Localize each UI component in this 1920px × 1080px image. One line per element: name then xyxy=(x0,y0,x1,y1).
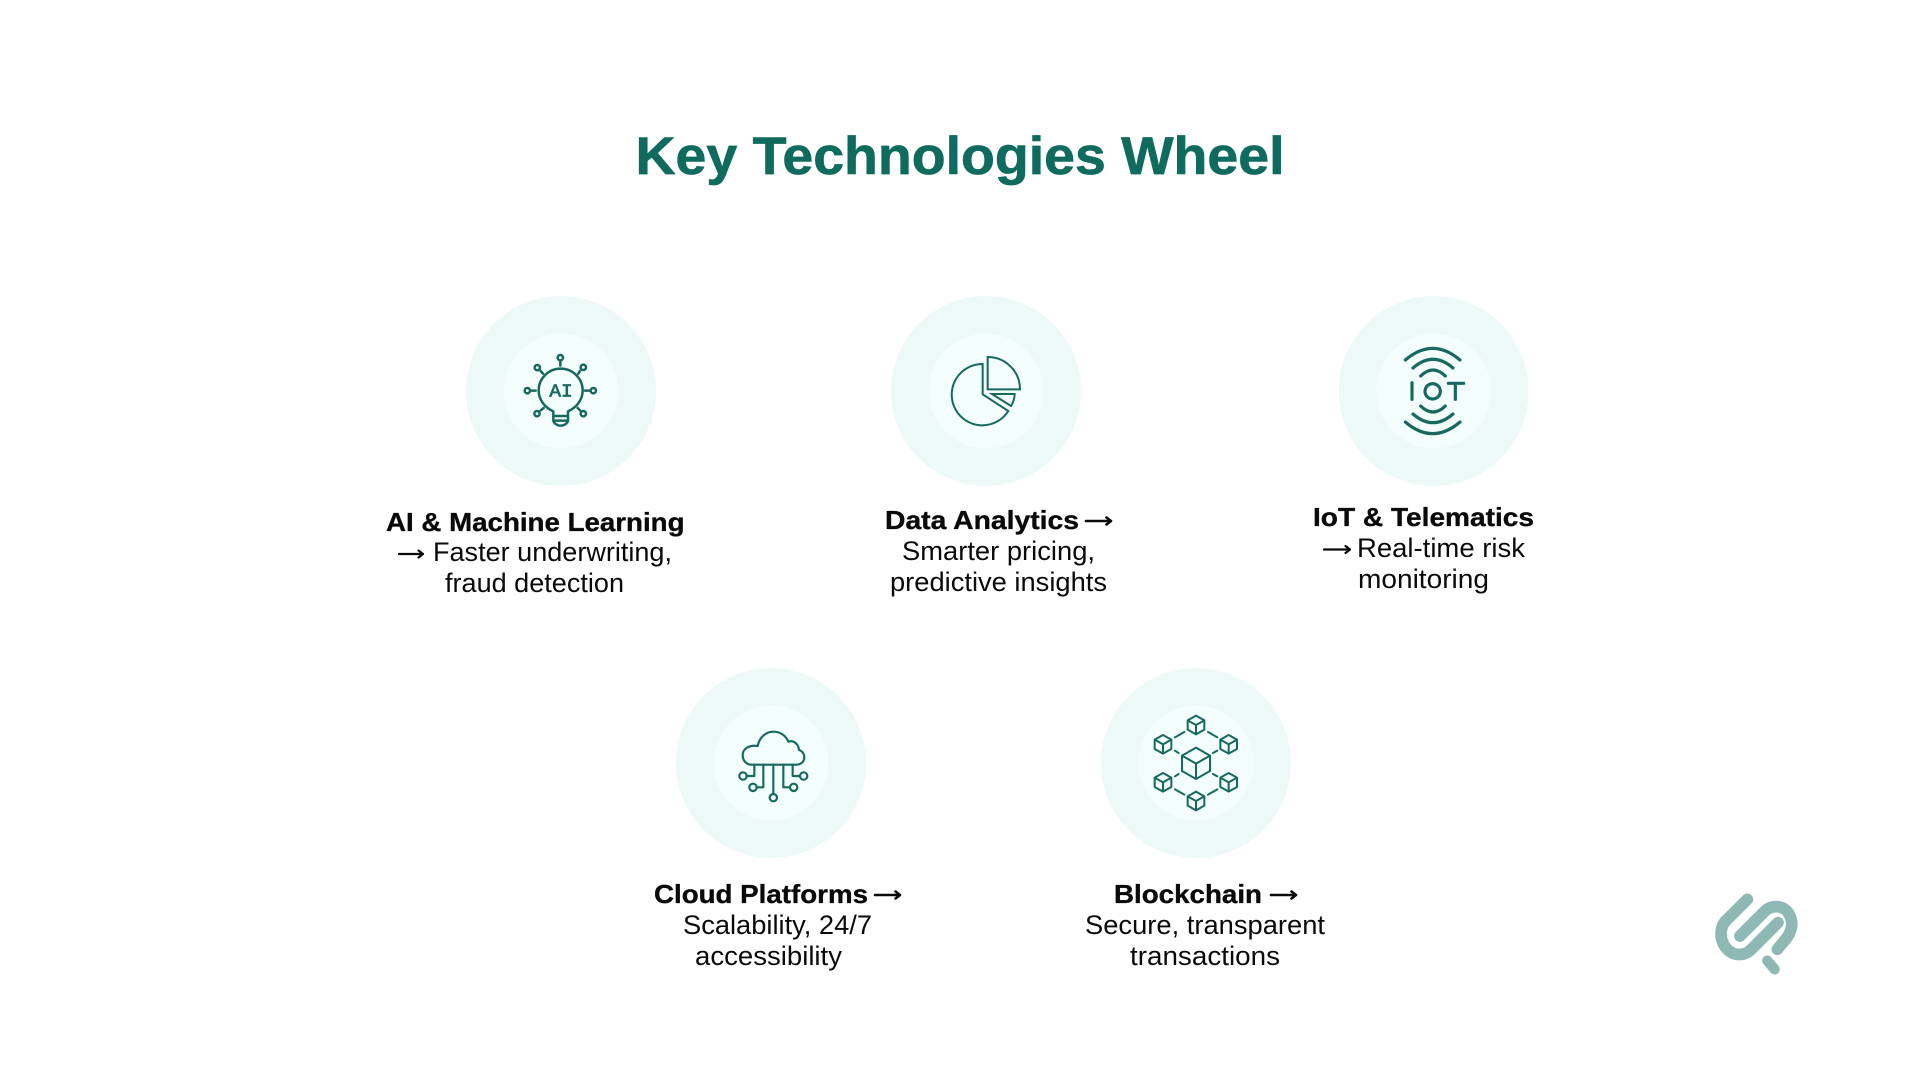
arrow xyxy=(399,550,423,558)
icon: IoT signal xyxy=(1405,348,1464,434)
icon: AI light bulb xyxy=(525,355,596,426)
icon circle: AI xyxy=(466,296,656,486)
label: Blockchain: Secure, transparent xyxy=(1085,910,1326,940)
panel: Data Analytics xyxy=(885,296,1111,597)
title: Key Technologies Wheel xyxy=(636,127,1284,186)
label: Cloud Platforms: accessibility xyxy=(695,941,843,971)
label: Cloud Platforms: Scalability, 24/7 xyxy=(683,910,872,940)
label: Data Analytics: predictive insights xyxy=(890,567,1107,597)
icon: blockchain cubes xyxy=(1155,716,1237,810)
label: Cloud Platforms: Cloud Platforms xyxy=(654,879,868,909)
icon: AI light bulb: AI xyxy=(549,381,573,403)
icon circle: blockchain xyxy=(1101,668,1291,858)
label: IoT & Telematics xyxy=(1313,502,1534,594)
label: Blockchain: Blockchain xyxy=(1114,879,1262,909)
arrow xyxy=(1324,546,1350,553)
label: Data Analytics: Smarter pricing, xyxy=(902,536,1095,566)
label: Cloud Platforms xyxy=(654,879,900,971)
label: Blockchain xyxy=(1085,879,1326,971)
panel: AI & Machine Learning xyxy=(386,296,684,598)
label: AI & Machine Learning: Faster underwriting, xyxy=(433,537,672,567)
panel: IoT & Telematics xyxy=(1313,296,1534,594)
panel: Cloud Platforms xyxy=(654,668,900,971)
icon: cloud network xyxy=(739,732,807,801)
arrow xyxy=(1086,518,1111,524)
icon: pie chart xyxy=(952,357,1020,425)
label: AI & Machine Learning: fraud detection xyxy=(445,568,624,598)
label: Blockchain: transactions xyxy=(1130,941,1280,971)
label: Data Analytics xyxy=(885,505,1111,597)
icon circle: data xyxy=(891,296,1081,486)
label: IoT & Telematics: Real-time risk xyxy=(1357,533,1526,563)
label: IoT & Telematics: monitoring xyxy=(1358,564,1489,594)
label: AI & Machine Learning xyxy=(386,507,684,598)
icon circle: IoT xyxy=(1339,296,1529,486)
label: AI & Machine Learning: AI & Machine Learning xyxy=(386,507,684,537)
label: IoT & Telematics: IoT & Telematics xyxy=(1313,502,1534,532)
label: Data Analytics: Data Analytics xyxy=(885,505,1079,535)
arrow xyxy=(1271,892,1296,898)
panel: Blockchain xyxy=(1085,668,1326,971)
arrow xyxy=(875,892,900,898)
logo xyxy=(1721,899,1792,969)
icon circle: cloud xyxy=(676,668,866,858)
